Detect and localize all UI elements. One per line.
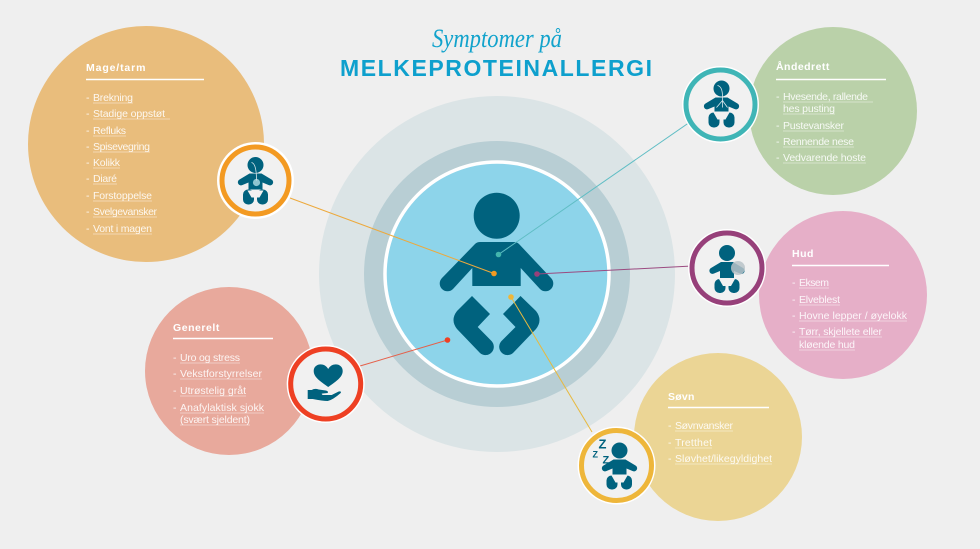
list: mage/tarm symptoms: Svelgevansker xyxy=(93,206,158,218)
panel: hud xyxy=(759,211,927,379)
panel: generelt xyxy=(145,287,313,455)
list: mage/tarm symptoms: Kolikk xyxy=(93,157,121,169)
list: generelt symptoms: Vekstforstyrrelser xyxy=(180,368,262,380)
icon: skin baby, purple ring xyxy=(688,229,766,307)
list: generelt symptoms: - xyxy=(173,385,177,397)
list: mage/tarm symptoms: - xyxy=(86,190,90,202)
icon: central baby xyxy=(440,193,553,355)
list: generelt symptoms: - xyxy=(173,352,177,364)
icon text: Z Z Z: Z xyxy=(598,436,606,452)
list: hud symptoms: Eksem xyxy=(799,277,829,289)
list: søvn symptoms: - xyxy=(668,420,672,432)
list: generelt symptoms: (svært sjeldent) xyxy=(180,414,250,426)
list: hud symptoms: - xyxy=(792,277,796,289)
list: hud symptoms: - xyxy=(792,310,796,322)
list: hud symptoms xyxy=(792,277,908,351)
list: mage/tarm symptoms: - xyxy=(86,223,90,235)
list: mage/tarm symptoms: Spisevegring xyxy=(93,141,150,153)
list: mage/tarm symptoms: - xyxy=(86,173,90,185)
list: mage/tarm symptoms: Brekning xyxy=(93,92,133,104)
icon text: Z Z Z: Z xyxy=(592,450,598,460)
list: åndedrett symptoms: - xyxy=(776,91,780,103)
list: søvn symptoms xyxy=(668,420,772,465)
icon text: Z Z Z: Z xyxy=(602,454,610,466)
list: generelt symptoms: Uro og stress xyxy=(180,352,240,364)
list: mage/tarm symptoms: - xyxy=(86,125,90,137)
list: mage/tarm symptoms: Vont i magen xyxy=(93,223,152,235)
connector: hud xyxy=(534,266,692,277)
icon: stomach baby, orange ring xyxy=(217,142,294,219)
list: mage/tarm symptoms: Refluks xyxy=(93,125,126,137)
list: generelt symptoms: Utrøstelig gråt xyxy=(180,385,246,397)
list: mage/tarm symptoms: - xyxy=(86,92,90,104)
list: generelt symptoms: - xyxy=(173,402,177,414)
list: åndedrett symptoms: Pustevansker xyxy=(783,120,844,132)
list: generelt symptoms xyxy=(173,352,265,426)
list: mage/tarm symptoms: Forstoppelse xyxy=(93,190,152,202)
list: åndedrett symptoms xyxy=(776,91,873,164)
heading: generelt: Generelt xyxy=(173,322,220,334)
list: søvn symptoms: Tretthet xyxy=(675,437,712,449)
list: søvn symptoms: Søvnvansker xyxy=(675,420,734,432)
connector: åndedrett xyxy=(496,122,690,257)
connector: generelt xyxy=(360,337,450,366)
list: mage/tarm symptoms: Stadige oppstøt xyxy=(93,108,165,120)
list: mage/tarm symptoms: - xyxy=(86,141,90,153)
title xyxy=(340,24,652,81)
panel: åndedrett xyxy=(749,27,917,195)
central concentric circles with baby xyxy=(319,96,675,452)
title script line: Symptomer på xyxy=(432,24,562,53)
list: hud symptoms: Tørr, skjellete eller xyxy=(799,326,882,338)
list: mage/tarm symptoms: - xyxy=(86,206,90,218)
heading: åndedrett: Åndedrett xyxy=(776,60,830,73)
list: hud symptoms: Hovne lepper / øyelokk xyxy=(799,310,908,322)
list: generelt symptoms: Anafylaktisk sjokk xyxy=(180,402,265,414)
list: åndedrett symptoms: - xyxy=(776,120,780,132)
list: hud symptoms: Elveblest xyxy=(799,294,840,306)
panel: mage/tarm xyxy=(28,26,264,262)
heading: mage/tarm: Mage/tarm xyxy=(86,62,146,74)
list: generelt symptoms: - xyxy=(173,368,177,380)
list: hud symptoms: kløende hud xyxy=(799,339,855,351)
list: mage/tarm symptoms xyxy=(86,92,170,235)
list: mage/tarm symptoms: - xyxy=(86,108,90,120)
list: hud symptoms: - xyxy=(792,294,796,306)
list: søvn symptoms: Sløvhet/likegyldighet xyxy=(675,453,772,465)
title main line: MELKEPROTEINALLERGI xyxy=(340,55,652,81)
connector: mage/tarm xyxy=(290,198,497,276)
icon: heart in hand, red ring xyxy=(287,345,365,423)
heading: hud: Hud xyxy=(792,248,814,260)
list: åndedrett symptoms: - xyxy=(776,152,780,164)
list: hud symptoms: - xyxy=(792,326,796,338)
icon: sleeping baby, yellow ring xyxy=(578,426,656,504)
list: åndedrett symptoms: Rennende nese xyxy=(783,136,854,148)
list: åndedrett symptoms: hes pusting xyxy=(783,103,835,115)
heading: søvn: Søvn xyxy=(668,391,695,403)
icon: lungs baby, teal ring xyxy=(682,66,759,143)
list: mage/tarm symptoms: Diaré xyxy=(93,173,117,185)
list: søvn symptoms: - xyxy=(668,437,672,449)
list: åndedrett symptoms: Hvesende, rallende xyxy=(783,91,868,103)
icon text: Z Z Z xyxy=(592,436,610,466)
list: søvn symptoms: - xyxy=(668,453,672,465)
list: åndedrett symptoms: Vedvarende hoste xyxy=(783,152,866,164)
connector: søvn xyxy=(508,294,592,432)
list: mage/tarm symptoms: - xyxy=(86,157,90,169)
list: åndedrett symptoms: - xyxy=(776,136,780,148)
panel: søvn xyxy=(634,353,802,521)
